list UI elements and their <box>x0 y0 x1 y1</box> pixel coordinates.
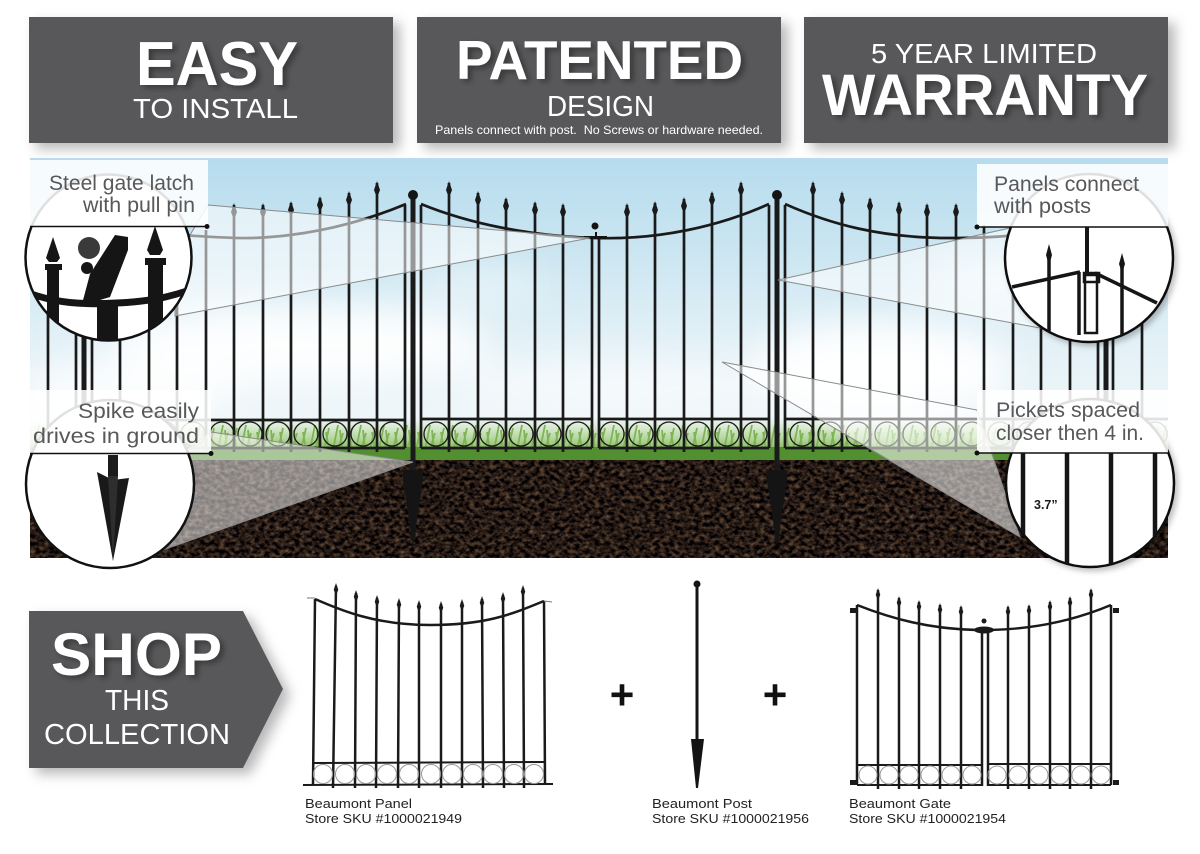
caption: panel: Beaumont Panel <box>305 796 412 811</box>
detail circle: post join <box>1005 174 1173 345</box>
fence pickets <box>48 183 1142 452</box>
fence <box>48 181 1168 547</box>
panel: patented design <box>417 17 781 143</box>
label: gate latch <box>30 160 208 227</box>
caption: panel: Store SKU #1000021949 <box>305 811 462 826</box>
dimension: 3.7 in: 3.7” <box>1034 498 1058 512</box>
caption: post <box>652 796 809 826</box>
shop arrow panel <box>29 611 283 768</box>
label: gate latch: Steel gate latch <box>49 172 194 195</box>
ring band <box>96 422 1167 446</box>
panel drawing <box>303 583 553 788</box>
subheading: collection: COLLECTION <box>44 719 230 751</box>
label: pickets spaced: closer then 4 in. <box>996 422 1144 445</box>
detail circle: latch <box>26 174 192 345</box>
subheading: to install: TO INSTALL <box>133 93 298 124</box>
plus sign: + <box>610 671 634 718</box>
leader line <box>974 450 1168 456</box>
heading: easy: EASY <box>136 30 298 99</box>
subheading: design: DESIGN <box>547 91 654 123</box>
detail circle: spike <box>26 400 194 568</box>
caption: gate <box>849 796 1006 826</box>
callout funnel: pickets spaced <box>722 362 1020 537</box>
callout: gate latch <box>26 160 210 345</box>
panel: easy to install <box>29 17 393 143</box>
callout: panels connect <box>974 164 1173 345</box>
subheading: 5 year limited: 5 YEAR LIMITED <box>871 38 1097 69</box>
heading: warranty: WARRANTY <box>822 63 1148 128</box>
callout funnel: gate latch <box>175 205 590 316</box>
label: pickets spaced <box>977 390 1168 453</box>
caption: gate: Store SKU #1000021954 <box>849 811 1006 826</box>
detail circle: pickets <box>1006 399 1174 570</box>
label: gate latch: with pull pin <box>82 194 195 217</box>
label: panels connect <box>977 164 1168 227</box>
label: panels connect: Panels connect <box>994 173 1139 196</box>
callout: spike <box>26 390 214 568</box>
leader line <box>974 224 1168 230</box>
post drawing <box>691 580 704 788</box>
caption: gate: Beaumont Gate <box>849 796 951 811</box>
callout: pickets spaced <box>974 390 1174 570</box>
plus sign: + <box>763 671 787 718</box>
heading: shop: SHOP <box>51 621 222 688</box>
sky with clouds <box>20 158 1168 458</box>
heading: patented: PATENTED <box>456 29 743 91</box>
label: spike: drives in ground <box>33 424 199 448</box>
label: pickets spaced: Pickets spaced <box>996 399 1140 422</box>
subheading: this: THIS <box>105 685 169 717</box>
soil <box>30 458 1168 558</box>
note: panels connect: Panels connect with post. No Screws or hardware needed. <box>435 123 763 137</box>
top rails <box>180 204 1060 238</box>
caption: panel <box>305 796 462 826</box>
grass <box>30 418 1168 460</box>
callout funnel: spike <box>164 432 414 550</box>
gate drawing <box>850 588 1119 789</box>
panel: warranty <box>804 17 1168 143</box>
label: spike <box>30 390 211 453</box>
panel: fence scene <box>20 158 1168 558</box>
caption: post: Beaumont Post <box>652 796 752 811</box>
stiles <box>76 205 1113 448</box>
caption: post: Store SKU #1000021956 <box>652 811 809 826</box>
product: beaumont post <box>652 580 809 826</box>
label: spike: Spike easily <box>78 399 199 423</box>
leader line <box>30 451 214 456</box>
fence posts with ground spikes <box>84 190 1106 547</box>
bottom rails <box>92 419 1168 448</box>
spear tips <box>231 181 959 216</box>
leader line <box>30 224 210 229</box>
label: panels connect: with posts <box>993 195 1091 218</box>
product: beaumont panel <box>303 583 553 826</box>
product: beaumont gate <box>849 588 1119 826</box>
callout funnel: panels connect <box>778 228 1040 328</box>
